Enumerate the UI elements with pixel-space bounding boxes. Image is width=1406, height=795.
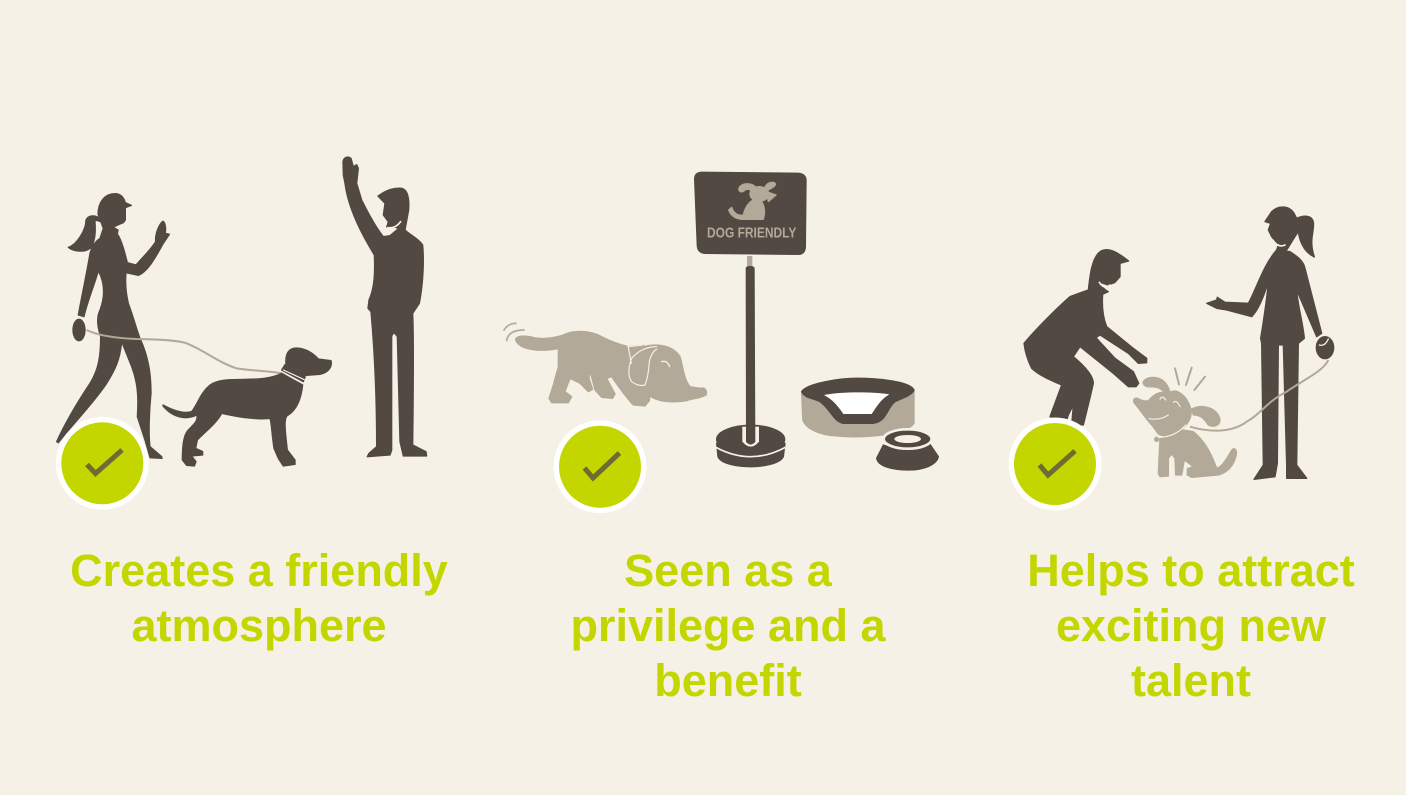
illustration: crouching man, happy dog and woman [1024,207,1334,479]
dog standing [163,348,331,466]
caption 2: benefit [654,655,802,706]
dog friendly sign [695,172,806,254]
panel: friendly atmosphere [56,157,448,651]
sniffing dog [504,323,707,406]
caption 3: exciting new [1056,600,1327,651]
check badge 3 [1008,418,1102,510]
caption 3: talent [1131,655,1251,706]
happy dog [1134,368,1236,477]
caption 2: privilege and a [570,600,887,651]
sign post [716,256,785,467]
panel: privilege and benefit [504,172,938,706]
check badge 1 [56,417,149,510]
woman walking [57,194,169,458]
caption 1: atmosphere [131,600,387,651]
illustration: sign, sniffing dog, bed and bowl [504,172,938,470]
sign text: DOG FRIENDLY [707,225,797,241]
woman standing [1207,207,1334,479]
illustration: woman, dog and waving man [57,157,427,466]
man waving [343,157,427,457]
man crouching [1024,250,1147,425]
caption 2: Seen as a [624,545,833,596]
leash [1190,360,1328,431]
dog bed [802,378,914,437]
caption 3: Helps to attract [1027,545,1355,596]
bowl [877,429,938,470]
leash [87,330,282,373]
panel: attract talent [1008,207,1355,706]
icon: sitting dog [729,182,776,219]
check badge 2 [554,420,646,513]
caption 1: Creates a friendly [70,545,448,596]
